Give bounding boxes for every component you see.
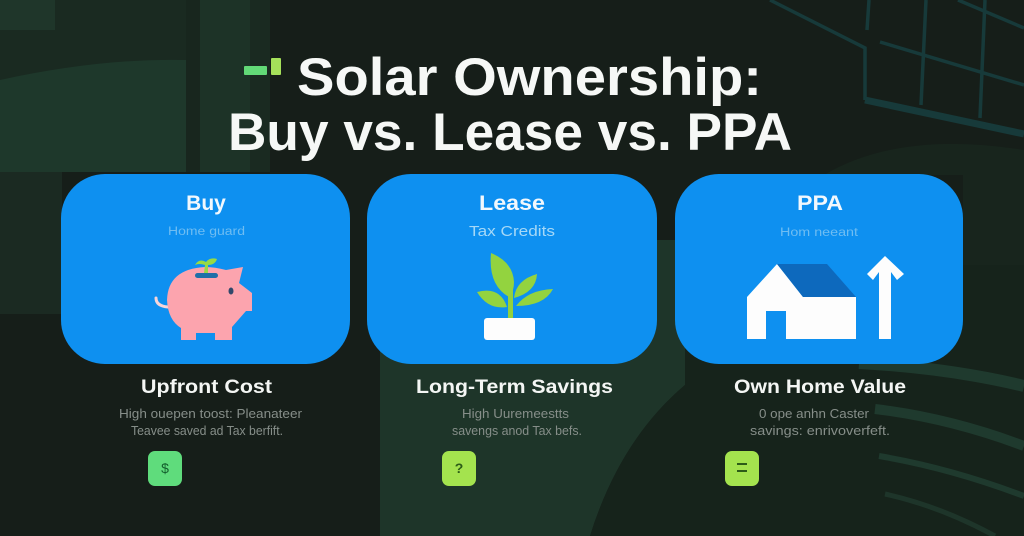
text: PPA subtitle: Hom neeant — [780, 227, 859, 239]
icon: potted plant — [477, 253, 553, 340]
icon: dollar badge: $ — [161, 460, 169, 476]
text: Upfront description: High ouepen toost: Pleanateer — [119, 407, 302, 421]
heading: Buy: Buy — [186, 192, 226, 215]
label: Long-Term Savings: Long-Term Savings — [416, 377, 613, 398]
text: Long-Term description: High Uuremeestts — [462, 407, 569, 421]
icon: title accent — [244, 58, 281, 75]
icon: up arrow — [867, 256, 904, 339]
text: Own Home description: savings: enrivoverfeft. — [750, 424, 890, 438]
text: Own Home description — [750, 407, 890, 438]
panel: Lease — [367, 174, 657, 364]
text: Long-Term description: savengs anod Tax befs. — [452, 424, 582, 438]
text: Upfront description — [119, 407, 302, 438]
heading: Lease: Lease — [479, 192, 545, 215]
label: Own Home Value: Own Home Value — [734, 377, 906, 398]
panel: PPA — [675, 174, 963, 364]
icon: lime badge — [442, 451, 476, 486]
icon: house — [747, 264, 856, 339]
text: Upfront description: Teavee saved ad Tax berfift. — [131, 424, 283, 438]
title — [228, 48, 792, 162]
text: Long-Term description — [452, 407, 582, 438]
icon: equals badge — [725, 451, 759, 486]
text: Own Home description: 0 ope anhn Caster — [759, 407, 869, 421]
text: Buy subtitle: Home guard — [168, 226, 245, 238]
title: Solar Ownership: — [297, 48, 762, 107]
icon: piggy bank with sprout — [156, 258, 252, 340]
text: Tax Credits: Tax Credits — [469, 223, 555, 240]
panel: Buy — [61, 174, 350, 364]
heading: PPA: PPA — [797, 192, 843, 215]
title: Buy vs. Lease vs. PPA — [228, 103, 792, 162]
label: Upfront Cost: Upfront Cost — [141, 377, 273, 398]
icon: lime badge: ? — [455, 460, 463, 476]
icon: dollar badge — [148, 451, 182, 486]
